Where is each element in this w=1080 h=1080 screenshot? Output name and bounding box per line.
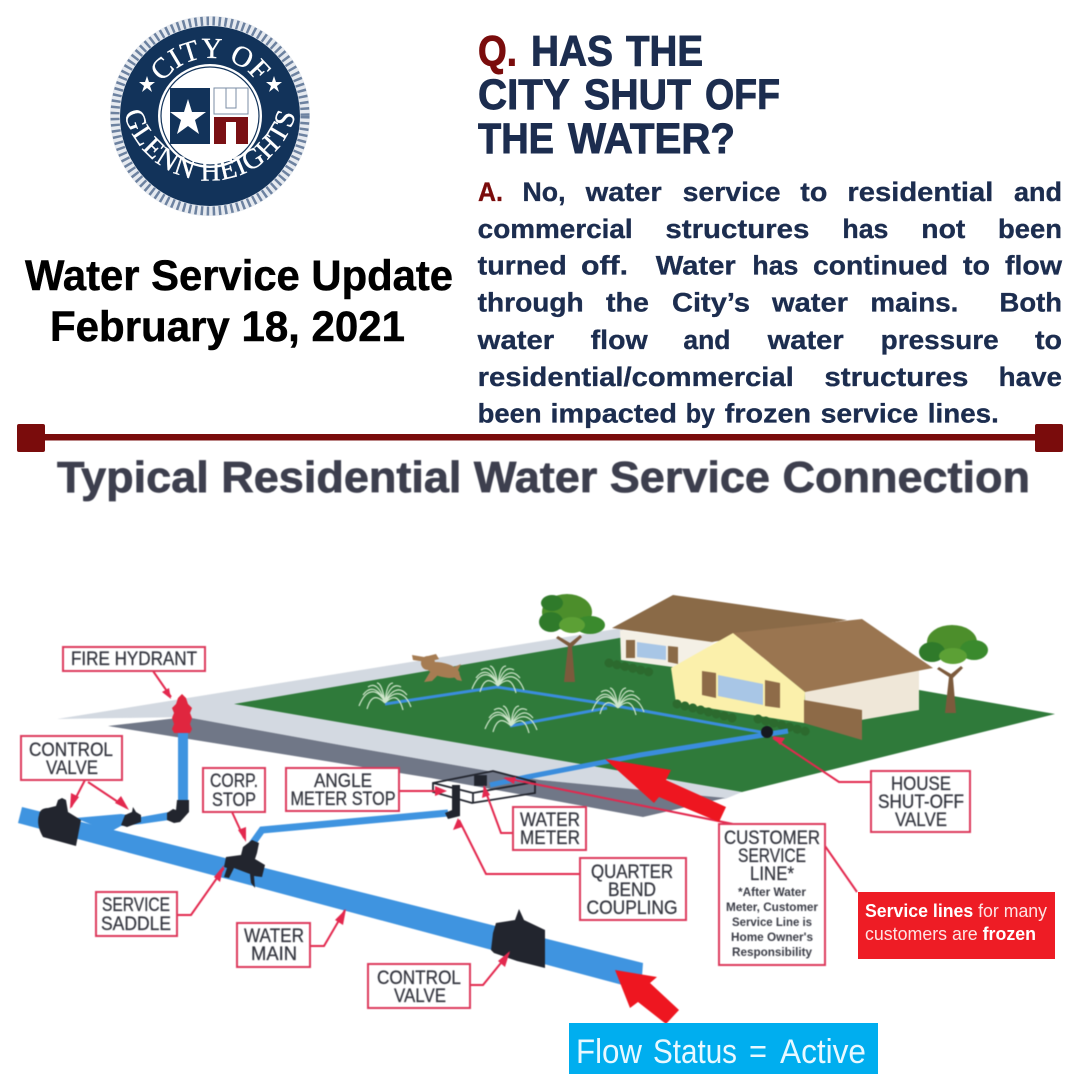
branch pipe — [75, 812, 169, 832]
label: customer service line: *After Water — [738, 885, 806, 899]
label: control valve left: VALVE — [46, 758, 98, 779]
fence — [804, 700, 862, 740]
label: service saddle: SERVICE — [102, 895, 170, 916]
answer paragraph: Both — [1000, 288, 1062, 318]
label: angle meter stop: METER STOP — [290, 789, 396, 810]
answer paragraph: to — [800, 177, 827, 207]
front garage wall — [805, 666, 919, 720]
answer paragraph: not — [921, 214, 965, 244]
service line pipe — [252, 813, 448, 844]
answer paragraph: Water — [656, 250, 736, 280]
logo: City of Glenn Heights seal: CITY OF — [152, 38, 272, 78]
answer paragraph: commercial — [478, 214, 633, 244]
answer paragraph: residential/commercial — [478, 362, 794, 392]
answer paragraph: been — [478, 399, 542, 429]
label: corp stop: CORP. — [210, 771, 258, 792]
label: house shut-off valve: SHUT-OFF — [878, 792, 964, 813]
callout: frozen service lines: Service lines for many — [865, 901, 1047, 921]
label: customer service line: Responsibility — [732, 945, 812, 959]
answer paragraph: flow — [591, 325, 649, 355]
callout: flow status: Active — [780, 1033, 866, 1071]
label: customer service line: CUSTOMER — [724, 828, 820, 849]
irrigation lines — [385, 687, 766, 733]
answer paragraph: continued — [813, 250, 948, 280]
answer paragraph: residential — [847, 177, 993, 207]
dog — [412, 654, 462, 682]
label: water main: WATER — [244, 926, 304, 947]
sidewalk — [57, 628, 742, 799]
divider bar with end caps — [17, 424, 1063, 452]
callout: frozen service lines — [858, 892, 1055, 959]
label: control valve left — [21, 736, 122, 780]
answer paragraph: has — [842, 214, 888, 244]
answer paragraph: impacted — [550, 399, 677, 429]
answer paragraph: to — [963, 250, 990, 280]
answer paragraph: off. — [581, 250, 628, 280]
callout: flow status: Flow — [576, 1033, 642, 1071]
answer paragraph: water — [585, 177, 662, 207]
label: fire hydrant: FIRE HYDRANT — [71, 649, 197, 670]
pointer lines — [70, 671, 871, 985]
label: quarter bend coupling — [580, 858, 686, 920]
main roof — [733, 619, 933, 692]
answer paragraph: structures — [824, 362, 968, 392]
answer paragraph: been — [998, 214, 1062, 244]
label: customer service line: Home Owner's — [731, 930, 813, 944]
question heading: THE — [478, 115, 554, 163]
red arrow to service line — [605, 759, 726, 822]
answer paragraph: pressure — [881, 325, 999, 355]
answer paragraph: mains. — [870, 288, 958, 318]
label: house shut-off valve: HOUSE — [891, 774, 951, 795]
label: control valve right — [368, 964, 470, 1008]
hydrant riser — [178, 733, 188, 803]
answer paragraph: A. — [478, 177, 503, 207]
answer paragraph — [477, 177, 1063, 429]
label: angle meter stop: ANGLE — [314, 771, 372, 792]
red arrow to water main — [615, 970, 679, 1024]
diagram heading: Typical Residential Water Service Connection — [57, 453, 1030, 502]
answer paragraph: lines. — [928, 399, 999, 429]
answer paragraph: water — [771, 288, 849, 318]
label: customer service line: Service Line is — [732, 915, 812, 929]
callout: flow status: Status — [653, 1033, 737, 1071]
label: quarter bend coupling: BEND — [608, 880, 656, 901]
answer paragraph: service — [683, 177, 781, 207]
answer paragraph: structures — [665, 214, 809, 244]
logo: City of Glenn Heights seal — [110, 16, 310, 216]
label: water meter — [513, 807, 586, 850]
customer service line — [490, 731, 788, 785]
road strip — [108, 717, 725, 817]
answer paragraph: water — [477, 325, 555, 355]
lawn — [234, 637, 1055, 792]
answer paragraph: service — [821, 399, 918, 429]
answer paragraph: to — [1035, 325, 1062, 355]
answer paragraph: water — [767, 325, 844, 355]
label: service saddle: SADDLE — [101, 914, 171, 935]
label: corp stop — [203, 768, 265, 812]
answer paragraph: No, — [522, 177, 566, 207]
label: corp stop: STOP — [212, 790, 256, 811]
answer paragraph: flow — [1005, 250, 1063, 280]
label: quarter bend coupling: QUARTER — [591, 862, 673, 883]
question heading: OFF — [705, 71, 780, 119]
label: house shut-off valve: VALVE — [895, 810, 947, 831]
sprinklers — [359, 666, 644, 733]
answer paragraph: by — [686, 399, 715, 429]
question heading — [478, 28, 780, 163]
meter box — [433, 771, 535, 803]
question heading: WATER? — [568, 115, 735, 163]
front shutters and window — [702, 671, 780, 708]
label: customer service line — [719, 824, 825, 965]
house shut-off valve — [761, 726, 773, 738]
tree right — [919, 625, 988, 713]
back windows — [626, 640, 678, 664]
answer paragraph: has — [752, 250, 798, 280]
question heading: CITY — [478, 71, 569, 119]
shrubs — [609, 663, 812, 733]
label: control valve right: CONTROL — [377, 968, 461, 989]
callout: frozen service lines: customers are frozen — [865, 924, 1036, 944]
answer paragraph: turned — [478, 250, 567, 280]
answer paragraph: City’s — [672, 288, 750, 318]
water main pipe — [18, 807, 643, 990]
label: service saddle — [96, 892, 177, 936]
label: water meter: METER — [520, 828, 580, 849]
label: water main: MAIN — [251, 944, 297, 965]
fire hydrant — [172, 694, 192, 733]
label: house shut-off valve — [871, 771, 970, 832]
label: quarter bend coupling: COUPLING — [586, 898, 678, 919]
answer paragraph: through — [478, 288, 584, 318]
title: Water Service Update — [25, 252, 453, 351]
label: water main — [237, 923, 310, 967]
label: customer service line: LINE* — [750, 864, 795, 885]
question heading: HAS — [531, 28, 613, 76]
title: Water Service Update: Water Service Update — [25, 252, 453, 300]
question heading: SHUT — [584, 71, 691, 119]
label: control valve right: VALVE — [394, 986, 446, 1007]
question heading: THE — [626, 28, 703, 76]
fittings — [38, 785, 545, 968]
answer paragraph: have — [999, 362, 1062, 392]
answer paragraph: the — [606, 288, 649, 318]
label: control valve left: CONTROL — [29, 740, 113, 761]
yellow gable front — [671, 633, 805, 723]
label: water meter: WATER — [520, 810, 580, 831]
answer paragraph: frozen — [725, 399, 811, 429]
label: angle meter stop — [286, 768, 399, 811]
label: customer service line: Meter, Customer — [726, 900, 818, 914]
back wing of house — [620, 630, 715, 668]
diagram: residential water service connection — [18, 594, 1055, 1024]
callout: flow status — [569, 1023, 878, 1074]
callout: flow status: = — [749, 1033, 767, 1071]
logo: City of Glenn Heights seal: GLENN HEIGHTS — [126, 110, 294, 181]
question heading: Q. — [478, 28, 517, 76]
answer paragraph: and — [683, 325, 730, 355]
label: customer service line: SERVICE — [738, 846, 806, 867]
date line: February 18, 2021 — [50, 303, 405, 351]
back roof — [612, 595, 847, 642]
answer paragraph: and — [1014, 177, 1062, 207]
tree left — [539, 594, 605, 682]
